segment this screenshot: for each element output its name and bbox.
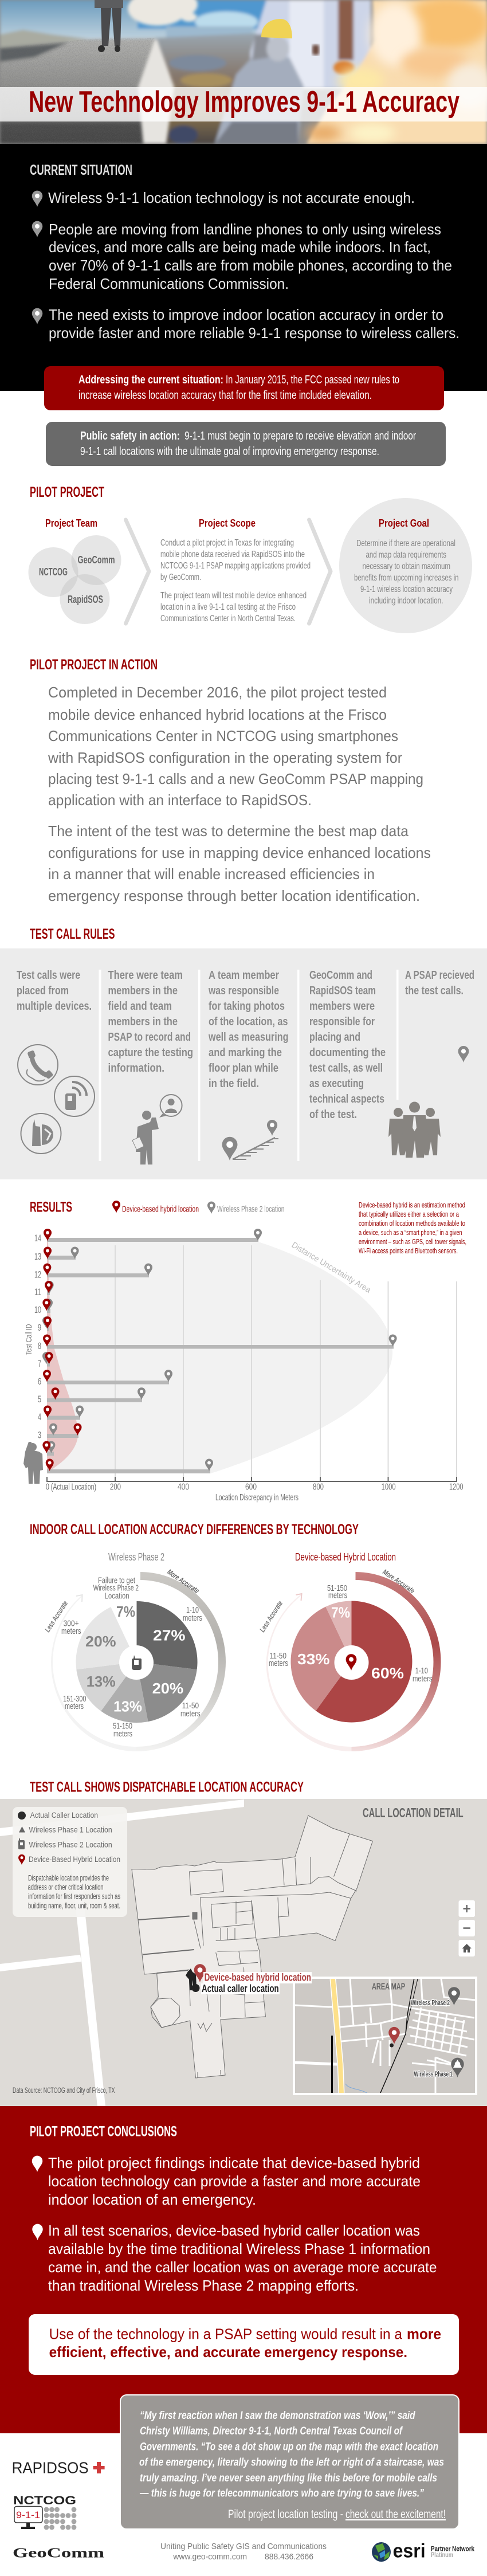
- callout: testimonial quote: check out the excitement!: [345, 2508, 446, 2521]
- callout: addressing the current situation: [44, 366, 444, 410]
- x axis labels: 0 (Actual Location): [46, 1482, 96, 1492]
- icon: group of people: [388, 1101, 441, 1158]
- rule: psap received: [405, 969, 474, 997]
- callout: testimonial quote: Christy Williams, Director 9-1-1, North Central Texas Council of: [140, 2425, 403, 2437]
- roads: [0, 1799, 244, 2106]
- rule: photos and floor plan: well as measuring: [208, 1031, 289, 1044]
- text block: pilot project description: The intent of the test was to determine the best map data: [48, 822, 409, 840]
- conclusion two: [48, 2222, 437, 2294]
- percent labels: 13%: [113, 1697, 142, 1715]
- range labels: 300+: [64, 1618, 79, 1629]
- bullet text: accuracy: Wireless 9-1-1 location technology is not accurate enough.: [48, 189, 415, 206]
- panel: project scope: mobile phone data received via RapidSOS into the: [160, 550, 305, 559]
- rule: multiple devices: multiple devices.: [17, 1000, 92, 1013]
- panel: project scope: Conduct a pilot project in Texas for integrating: [160, 538, 294, 548]
- rule: multiple devices: Test calls were: [17, 969, 80, 982]
- conclusion two: In all test scenarios, device-based hybrid caller location was: [48, 2222, 420, 2239]
- caller person and hybrid pin: [186, 1964, 206, 1992]
- label: area map: AREA MAP: [372, 1982, 405, 1992]
- legend: device-based hybrid: Device-based hybrid location: [122, 1205, 199, 1214]
- pin: hybrid location: [388, 2027, 400, 2044]
- rule: psap received: the test calls.: [405, 985, 464, 997]
- y axis labels: 7: [38, 1358, 41, 1369]
- range labels: 51-150: [327, 1583, 347, 1593]
- rule: placing and documenting: responsible for: [309, 1015, 375, 1028]
- icon: location pin: [32, 308, 42, 324]
- venn diagram of team members: RapidSOS: [68, 594, 103, 605]
- range labels: Wireless Phase 2: [93, 1583, 139, 1593]
- rule: team members: members in the: [108, 1015, 178, 1028]
- rule: photos and floor plan: was responsible: [208, 985, 279, 997]
- heading: pilot project in action: PILOT PROJECT IN ACTION: [30, 657, 158, 673]
- percent labels: 20%: [85, 1633, 116, 1650]
- rule: photos and floor plan: in the field.: [209, 1077, 259, 1090]
- legend panel: [13, 1807, 127, 1917]
- bullet text: need to improve: The need exists to improve indoor location accuracy in order to: [49, 306, 443, 323]
- logo: GeoComm: GeoComm: [13, 2546, 104, 2561]
- callout: public safety in action: 9-1-1 call locations with the ultimate goal of improving emergency response.: [80, 445, 379, 458]
- label: less accurate: Less Accurate: [258, 1599, 284, 1634]
- text block: pilot project description: with RapidSOS configuration in the operating system for: [48, 749, 402, 766]
- panel: project scope: The project team will test mobile device enhanced: [160, 591, 307, 601]
- callout: more efficient response: [29, 2314, 459, 2375]
- logo: esri partner network: esri: [393, 2540, 426, 2562]
- icon: caller silhouette: [23, 1442, 43, 1484]
- rule: team members: capture the testing: [108, 1046, 193, 1059]
- callout: more efficient response: Use of the technology in a PSAP setting would result in a: [49, 2326, 403, 2343]
- accuracy ring: [266, 1572, 441, 1751]
- panel: project goal: and map data requirements: [366, 550, 446, 560]
- panel: project scope: Project Scope: [199, 517, 256, 529]
- legend panel: building name, floor, unit, room & seat.: [28, 1901, 120, 1910]
- pin: wireless phase 2: [448, 1987, 460, 2006]
- bullet text: need to improve: provide faster and more reliable 9-1-1 response to wireless callers.: [49, 324, 459, 342]
- rule: team members: information.: [108, 1062, 164, 1075]
- icon: person on phone with speech bubble: [132, 1095, 182, 1165]
- conclusion one: location technology can provide a faster and more accurate: [48, 2173, 421, 2190]
- range labels: 11-50: [269, 1651, 286, 1661]
- icon: location pin: [458, 1046, 469, 1062]
- conclusion one: indoor location of an emergency.: [48, 2191, 256, 2208]
- legend: wireless phase 2: Wireless Phase 2 location: [217, 1205, 284, 1214]
- rule: team members: PSAP to record and: [108, 1031, 191, 1044]
- range labels: [61, 1576, 202, 1739]
- bars: location discrepancy: [47, 1238, 394, 1473]
- heading: current situation: CURRENT SITUATION: [30, 162, 132, 178]
- firefighter helmet: [261, 19, 292, 38]
- logo: esri partner network: [372, 2540, 474, 2562]
- heading: results: RESULTS: [30, 1199, 72, 1215]
- heading: pilot project: PILOT PROJECT: [30, 484, 104, 500]
- text block: pilot project description: Communications Center in NCTCOG using smartphones: [48, 727, 398, 744]
- legend panel: information for first responders such as: [28, 1891, 120, 1900]
- y axis labels: [34, 1233, 41, 1441]
- bullet text: need to improve: [49, 306, 459, 342]
- percent labels: [297, 1603, 404, 1681]
- businessman legs: [95, 0, 123, 52]
- panel: project goal: [339, 498, 472, 633]
- range labels: 1-10: [415, 1666, 428, 1676]
- legend panel: Device-Based Hybrid Location: [29, 1854, 120, 1864]
- rule: team members: members in the: [108, 985, 178, 997]
- rule: placing and documenting: as executing: [309, 1077, 364, 1090]
- venn diagram of team members: NCTCOG: [39, 566, 68, 578]
- heading: pilot project conclusions: PILOT PROJECT CONCLUSIONS: [30, 2124, 177, 2140]
- label: actual caller location: Actual caller location: [202, 1983, 279, 1994]
- panel: results chart: [23, 1199, 466, 1503]
- rule: photos and floor plan: and marking the: [209, 1046, 282, 1059]
- percent labels: 60%: [371, 1664, 404, 1681]
- y axis title: Test Call ID: [24, 1324, 34, 1355]
- y axis labels: 14: [34, 1233, 41, 1244]
- x axis labels: 200: [110, 1482, 121, 1492]
- y axis labels: 5: [38, 1394, 41, 1405]
- accuracy ring: [51, 1572, 226, 1751]
- device accuracy area: [47, 1241, 78, 1472]
- y axis labels: 8: [38, 1340, 41, 1351]
- rule: placing and documenting: members were: [309, 1000, 375, 1013]
- panel: project goal: necessary to obtain maximum: [362, 562, 450, 571]
- callout: public safety in action: 9-1-1 must begin to prepare to receive elevation and indoor: [184, 430, 416, 442]
- heading: test call shows dispatchable location accuracy: TEST CALL SHOWS DISPATCHABLE LOCATION ACCURACY: [30, 1779, 304, 1795]
- legend panel: Wireless Phase 2 Location: [29, 1840, 112, 1849]
- logo: esri partner network: Partner Network: [431, 2544, 474, 2553]
- icon: mobile with signal: [54, 1076, 95, 1116]
- rule: placing and documenting: placing and: [309, 1031, 360, 1044]
- footer: contact text: www.geo-comm.com: [172, 2552, 247, 2562]
- pins: device-based hybrid: [42, 1229, 81, 1471]
- label: device-based hybrid location: Device-based hybrid location: [205, 1971, 311, 1983]
- panel: pilot project conclusions: [0, 2106, 487, 2433]
- text block: pilot project description: application with an interface to RapidSOS.: [48, 791, 312, 809]
- rule: photos and floor plan: for taking photos: [209, 1000, 285, 1013]
- label: wireless phase 1: Wireless Phase 1: [414, 2070, 453, 2078]
- text block: pilot project description: [48, 684, 431, 904]
- panel: test call rules: [0, 948, 487, 1179]
- arrow: chevron to scope: [126, 520, 149, 624]
- range labels: meters: [61, 1626, 81, 1636]
- text block: pilot project description: placing test 9-1-1 calls and a new GeoComm PSAP mapping: [48, 770, 423, 787]
- callout: testimonial quote: [120, 2395, 459, 2529]
- conclusion one: [48, 2154, 421, 2208]
- range labels: Location: [105, 1591, 129, 1601]
- panel: project team: [29, 517, 121, 624]
- range labels: meters: [269, 1658, 288, 1668]
- x axis labels: [46, 1482, 464, 1503]
- conclusion two: came in, and the caller location was on average more accurate: [48, 2259, 437, 2276]
- bullet text: landline to wireless: devices, and more calls are being made while indoors. In fact,: [49, 238, 431, 256]
- range labels: meters: [65, 1701, 84, 1711]
- x axis labels: 400: [178, 1482, 189, 1492]
- venn diagram of team members: GeoComm: [78, 554, 115, 566]
- text block: pilot project description: Completed in December 2016, the pilot project tested: [48, 684, 387, 701]
- panel: device-based hybrid pie chart: [258, 1551, 441, 1751]
- percent labels: 7%: [116, 1603, 135, 1620]
- icon: location pin: [32, 2156, 42, 2172]
- percent labels: 33%: [297, 1650, 330, 1668]
- callout: addressing the current situation: Addressing the current situation:: [78, 374, 223, 386]
- conclusion two: than traditional Wireless Phase 2 mapping efforts.: [48, 2277, 359, 2294]
- rule: placing and documenting: documenting the: [309, 1046, 386, 1059]
- range labels: meters: [183, 1613, 202, 1623]
- callout: testimonial quote: — this is huge for telecommunicators who are trying to save lives.”: [139, 2487, 424, 2500]
- rule: team members: field and team: [108, 1000, 172, 1013]
- rule: photos and floor plan: of the location, as: [209, 1015, 288, 1028]
- callout: more efficient response: more: [407, 2326, 441, 2343]
- rule: placing and documenting: of the test.: [309, 1108, 357, 1121]
- title band: [0, 87, 487, 121]
- hero photo banner: [0, 0, 487, 146]
- x axis labels: 600: [245, 1482, 257, 1492]
- y axis labels: 4: [38, 1411, 41, 1422]
- callout: testimonial quote: Pilot project location testing -: [228, 2508, 343, 2521]
- percent labels: 20%: [152, 1680, 183, 1697]
- y axis labels: 13: [34, 1251, 41, 1262]
- logo: NCTCOG 9-1-1: NCTCOG: [13, 2494, 76, 2507]
- map controls: [458, 1900, 475, 1956]
- icon: map pins and floor plan stairs: [222, 1120, 278, 1160]
- panel: project scope: location in a live 9-1-1 call testing at the Frisco: [160, 602, 296, 612]
- data source note: Data Source: NCTCOG and City of Frisco, TX: [13, 2085, 115, 2095]
- callout: more efficient response: efficient, effective, and accurate emergency response.: [49, 2343, 407, 2361]
- footer: contact text: [160, 2542, 327, 2562]
- bullet text: landline to wireless: over 70% of 9-1-1 calls are from mobile phones, according to the: [49, 257, 452, 274]
- rule: placing and documenting: GeoComm and: [309, 969, 372, 982]
- y axis labels: 3: [38, 1429, 41, 1441]
- logo: esri partner network: Platinum: [431, 2551, 453, 2559]
- range labels: meters: [328, 1591, 347, 1600]
- range labels: [269, 1583, 432, 1684]
- panel: project goal: including indoor location.: [369, 596, 443, 606]
- callout: public safety in action: Public safety in action:: [80, 430, 180, 442]
- grid lines: [115, 1245, 457, 1481]
- percent labels: 27%: [153, 1626, 186, 1644]
- rule: photos and floor plan: floor plan while: [209, 1062, 278, 1075]
- range labels: meters: [113, 1729, 132, 1739]
- rule: multiple devices: [17, 969, 92, 1013]
- road centre line: [138, 40, 174, 144]
- panel: project goal: 9-1-1 wireless location accuracy: [360, 585, 453, 594]
- text block: pilot project description: configurations for use in mapping device enhanced locations: [48, 844, 431, 861]
- panel: project scope: [160, 517, 311, 624]
- cloud: [128, 0, 198, 26]
- road texture: [0, 34, 160, 146]
- label: distance uncertainty area: Distance Uncertainty Area: [290, 1240, 373, 1295]
- rule: photos and floor plan: A team member: [209, 969, 279, 982]
- x axis: [47, 1477, 457, 1481]
- rule: team members: [108, 969, 193, 1075]
- y axis labels: 9: [38, 1322, 41, 1333]
- venn diagram of team members: [29, 535, 121, 624]
- range labels: 11-50: [182, 1701, 199, 1711]
- percent labels: 7%: [331, 1603, 350, 1621]
- panel: current situation: [0, 144, 487, 391]
- arrow: chevron to goal: [309, 520, 331, 624]
- callout: testimonial quote: “My first reaction when I saw the demonstration was ‘Wow,’” said: [140, 2410, 415, 2422]
- x axis labels: Location Discrepancy in Meters: [215, 1493, 299, 1503]
- panel: call location map: [0, 1799, 487, 2106]
- range labels: 151-300: [63, 1694, 86, 1704]
- icon: location pin: [32, 2224, 43, 2240]
- rule: placing and documenting: technical aspects: [309, 1093, 384, 1105]
- icon: satellite phone and globe: [21, 1113, 61, 1154]
- rule: placing and documenting: [309, 969, 386, 1121]
- text block: pilot project description: emergency response through better location identification.: [48, 887, 420, 904]
- text block: pilot project description: in a manner that will enable increased efficiencies in: [48, 865, 375, 883]
- conclusion one: The pilot project findings indicate that device-based hybrid: [48, 2154, 420, 2171]
- icon: location pin: [32, 191, 42, 207]
- bullet text: landline to wireless: People are moving from landline phones to only using wireless: [49, 221, 441, 238]
- rule: photos and floor plan: [208, 969, 289, 1090]
- pie slices: [290, 1601, 412, 1723]
- x axis labels: 800: [313, 1482, 324, 1492]
- legend panel: Actual Caller Location: [30, 1810, 98, 1820]
- rule: team members: There were team: [108, 969, 183, 982]
- bullet text: landline to wireless: [49, 221, 452, 292]
- icon: map pin: [346, 1654, 356, 1671]
- footer: contact text: 888.436.2666: [265, 2552, 313, 2562]
- y axis labels: 10: [34, 1304, 41, 1315]
- bullet text: landline to wireless: Federal Communications Commission.: [49, 275, 289, 292]
- callout: addressing the current situation: In January 2015, the FCC passed new rules to: [226, 374, 399, 386]
- legend: device-based hybrid: [112, 1201, 199, 1214]
- note: device-based hybrid definition: [359, 1201, 466, 1255]
- label: less accurate: Less Accurate: [43, 1599, 69, 1634]
- pin: wireless phase 1: [451, 2058, 464, 2077]
- legend panel: Wireless Phase 1 Location: [29, 1825, 112, 1834]
- y axis labels: 12: [34, 1269, 41, 1280]
- percent labels: 13%: [87, 1673, 116, 1690]
- legend: wireless phase 2: [207, 1201, 284, 1214]
- x axis labels: 1000: [382, 1482, 396, 1492]
- label: more accurate: More Accurate: [381, 1567, 417, 1595]
- rule: placing and documenting: test calls, as well: [309, 1062, 383, 1075]
- footer: contact text: Uniting Public Safety GIS and Communications: [160, 2542, 327, 2551]
- logo: RapidSOS: RAPIDSOS: [12, 2459, 89, 2477]
- panel: wireless phase 2 pie chart: Wireless Phase 2: [108, 1551, 164, 1563]
- logo: NCTCOG 9-1-1: [13, 2494, 76, 2530]
- building floor plan: [132, 1816, 372, 2078]
- logo: NCTCOG 9-1-1: 9-1-1: [16, 2510, 40, 2520]
- rule: multiple devices: placed from: [17, 985, 69, 997]
- panel: project scope: NCTCOG 9-1-1 PSAP mapping applications provided: [160, 561, 311, 571]
- range labels: meters: [180, 1709, 201, 1719]
- inset: area map: [293, 1977, 477, 2095]
- legend panel: address or other critical location: [28, 1882, 103, 1891]
- heading: test call rules: TEST CALL RULES: [30, 926, 115, 942]
- y axis labels: 6: [38, 1376, 41, 1387]
- rule: placing and documenting: RapidSOS team: [309, 985, 376, 997]
- legend panel: Dispatchable location provides the: [28, 1873, 109, 1882]
- text block: pilot project description: mobile device enhanced hybrid locations at the Frisco: [48, 706, 387, 723]
- pie slices: [76, 1601, 198, 1723]
- percent labels: [85, 1603, 186, 1715]
- y axis labels: 11: [34, 1287, 41, 1297]
- range labels: Failure to get: [98, 1576, 136, 1585]
- panel: project scope: Communications Center in North Central Texas.: [160, 614, 296, 624]
- label: more accurate: More Accurate: [166, 1567, 201, 1595]
- range labels: 51-150: [113, 1722, 132, 1731]
- icon: landline handset: [18, 1045, 58, 1085]
- label: wireless phase 2: Wireless Phase 2: [411, 1998, 450, 2007]
- pins: wireless phase 2: [42, 1229, 397, 1471]
- icon: phone: [132, 1655, 142, 1670]
- callout: public safety in action: [46, 422, 446, 466]
- panel: project scope: by GeoComm.: [160, 573, 201, 582]
- panel: project goal: Project Goal: [379, 517, 429, 529]
- distance uncertainty area: [47, 1242, 392, 1473]
- x axis labels: 1200: [449, 1482, 464, 1492]
- panel: project team: Project Team: [45, 517, 97, 529]
- panel: wireless phase 2 pie chart: [43, 1551, 226, 1751]
- conclusion two: available by the time traditional Wireless Phase 1 information: [48, 2240, 430, 2257]
- panel: device-based hybrid pie chart: Device-based Hybrid Location: [295, 1551, 396, 1563]
- callout: addressing the current situation: increase wireless location accuracy that for the first time included elevation.: [78, 389, 372, 402]
- range labels: meters: [413, 1674, 432, 1684]
- range labels: 1-10: [186, 1605, 199, 1615]
- icon: location pin: [32, 221, 42, 237]
